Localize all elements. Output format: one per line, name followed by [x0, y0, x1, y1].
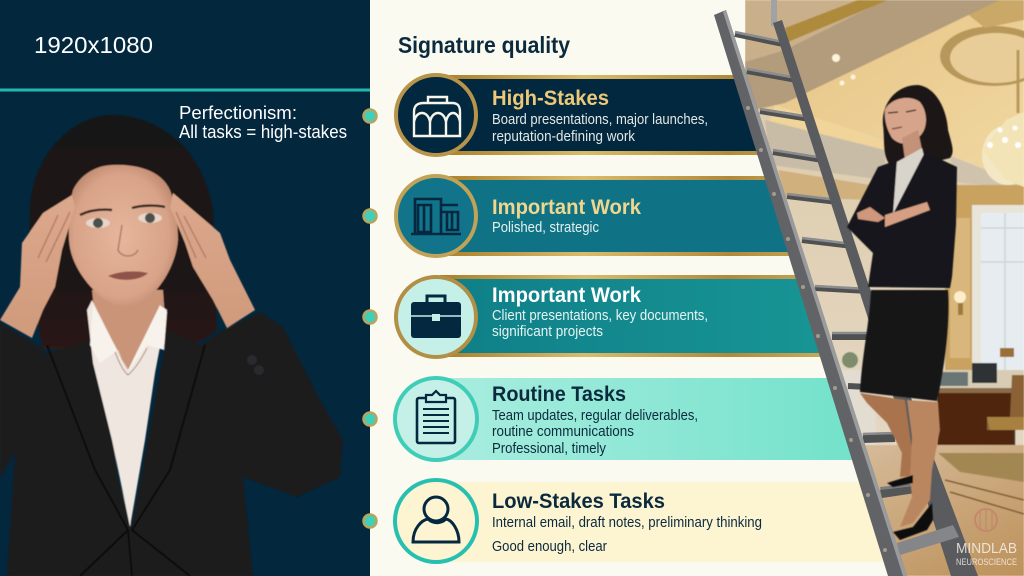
bar: low-stakes tasks [440, 482, 920, 562]
bar: high-stakes [440, 75, 920, 155]
icon: solid briefcase [396, 277, 476, 357]
icon: bar chart [396, 176, 476, 256]
logo: mindlab neuroscience [956, 509, 1017, 567]
text: important work client: Important Work [492, 284, 641, 307]
ladder rungs [735, 32, 942, 498]
text: important work client [492, 284, 708, 340]
ladder right rail [773, 20, 978, 576]
connector dots [364, 110, 376, 528]
text: high-stakes tier: Board presentations, major launches, [492, 112, 708, 128]
illustration: confident woman with crossed arms on ladder [847, 85, 957, 540]
logo: mindlab neuroscience: MINDLAB [956, 540, 1017, 557]
bar: important work, polished [440, 176, 920, 256]
text: important work polished: Important Work [492, 196, 641, 219]
illustration: ladder [714, 0, 978, 576]
text: high-stakes tier: High-Stakes [492, 87, 609, 110]
text: important work polished: Polished, strategic [492, 220, 599, 236]
legs and shoes [860, 393, 940, 540]
callout: perfectionism: Perfectionism: [179, 103, 297, 123]
illustration: luxury office room [745, 0, 1024, 576]
bar: routine tasks [440, 378, 920, 460]
heading: signature quality: Signature quality [398, 32, 570, 58]
face details [80, 206, 165, 280]
panel: tier bars and icons [395, 75, 920, 562]
icon: clipboard [395, 378, 477, 460]
text: routine tasks: Team updates, regular deliverables, [492, 408, 698, 424]
text: important work polished [492, 196, 641, 236]
text: low-stakes tasks [492, 490, 762, 555]
illustration: stressed woman holding her head [0, 115, 343, 576]
icon: briefcase with arches [396, 75, 476, 155]
text: routine tasks: routine communications [492, 424, 634, 440]
ladder left rail [714, 10, 907, 576]
bar: important work, client [440, 275, 920, 357]
icon: person [395, 480, 477, 562]
text: high-stakes tier [492, 87, 708, 145]
text: low-stakes tasks: Low-Stakes Tasks [492, 490, 665, 513]
text: important work client: significant projects [492, 324, 603, 340]
ladder bottom step [897, 525, 959, 555]
text: routine tasks: Professional, timely [492, 441, 607, 457]
text: low-stakes tasks: Internal email, draft notes, preliminary thinking [492, 515, 762, 531]
callout: perfectionism [179, 103, 347, 142]
text: low-stakes tasks: Good enough, clear [492, 539, 607, 555]
text: high-stakes tier: reputation-defining work [492, 129, 636, 145]
text: routine tasks [492, 383, 698, 457]
callout: perfectionism: All tasks = high-stakes [179, 122, 347, 142]
text: important work client: Client presentations, key documents, [492, 308, 708, 324]
resolution label: 1920x1080 [34, 32, 153, 58]
text: routine tasks: Routine Tasks [492, 383, 626, 406]
panel: left dark background [0, 0, 370, 576]
